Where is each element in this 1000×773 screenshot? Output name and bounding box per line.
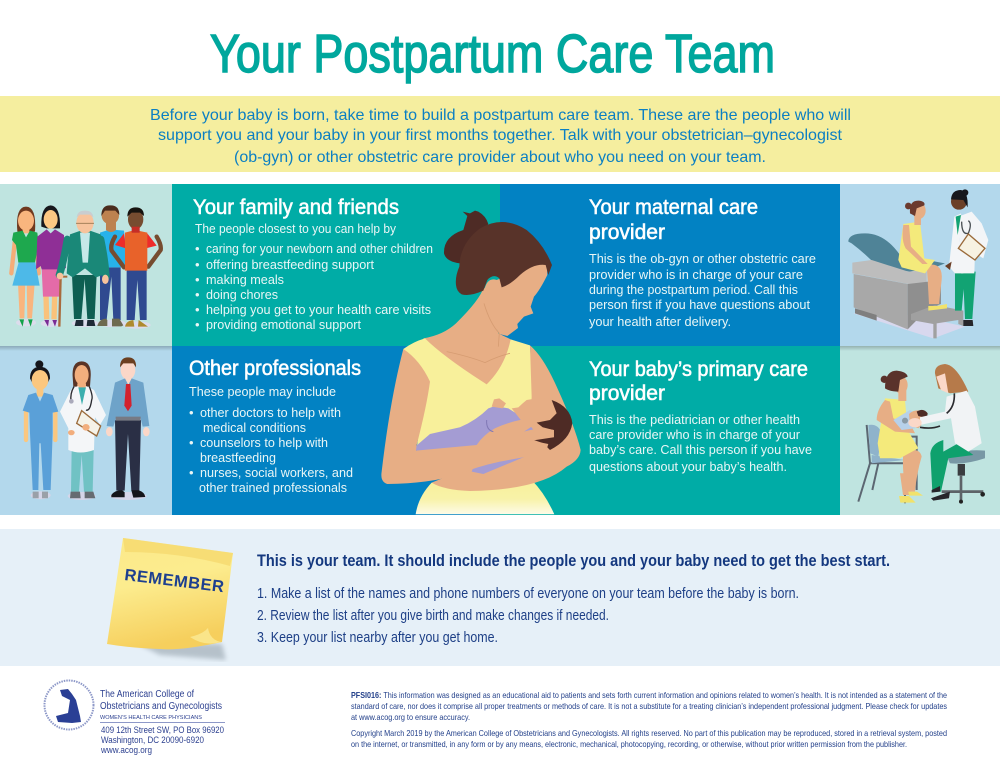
baby hand: [492, 398, 506, 408]
icon: exam room with doctor: [848, 189, 988, 338]
body text: [589, 251, 816, 329]
remember heading: This is your team. It should include the people you and your baby need to get the best start.: [257, 552, 890, 570]
body text: This is the ob-gyn or other obstetric care: [589, 251, 816, 266]
stool: [942, 450, 985, 504]
intro banner: Before your baby is born, take time to build a postpartum care team. These are the people who will: [150, 107, 851, 124]
bullet list: breastfeeding: [200, 450, 276, 465]
body text: [589, 412, 812, 474]
numbered list: 3. Keep your list nearby after you get home.: [257, 630, 498, 646]
bullet list: •: [189, 405, 194, 420]
heading: provider: [589, 221, 665, 244]
bullet list: counselors to help with: [200, 435, 328, 450]
bullet list: •: [195, 257, 200, 272]
man in tie: [106, 357, 150, 498]
panel: your baby's primary care provider: [589, 358, 812, 474]
bullet list: •: [195, 272, 200, 287]
bullet list: doing chores: [206, 287, 278, 302]
icon: family and friends group: [11, 205, 161, 329]
hair: [456, 222, 552, 295]
left arm and hand: [381, 349, 554, 484]
bun: [444, 211, 488, 263]
bullet list: •: [189, 435, 194, 450]
panel: other professionals: [189, 357, 361, 495]
body text: This is the pediatrician or other health: [589, 412, 800, 427]
right arm: [432, 345, 581, 491]
mother: [877, 371, 923, 503]
bullet list: •: [195, 287, 200, 302]
exam table: [848, 233, 945, 329]
body text: questions about your baby’s health.: [589, 459, 787, 474]
bullet list: making meals: [206, 272, 284, 287]
grandfather in teal jacket: [57, 211, 109, 327]
step: [911, 305, 963, 338]
bullet list: caring for your newborn and other children: [206, 241, 433, 256]
address: [100, 725, 224, 755]
sticky note: [107, 538, 233, 660]
bullet list: •: [195, 302, 200, 317]
organisation name: [100, 689, 222, 721]
address: 409 12th Street SW, PO Box 96920: [101, 725, 224, 735]
bullet list: helping you get to your health care visits: [206, 302, 431, 317]
note label: REMEMBER: [124, 566, 225, 596]
body text: provider who is in charge of your care: [589, 267, 803, 282]
bullet list: other trained professionals: [199, 480, 347, 495]
numbered list: 2. Review the list after you give birth and make changes if needed.: [257, 608, 609, 624]
address: Washington, DC 20090-6920: [101, 735, 204, 745]
panel: remember band: [0, 529, 1000, 666]
heading: provider: [589, 382, 665, 405]
bullet list: other doctors to help with: [200, 405, 341, 420]
intro text: These people may include: [189, 384, 336, 399]
seal: [44, 680, 94, 730]
organisation name: The American College of: [100, 689, 194, 700]
man in orange: [111, 207, 161, 327]
disclaimer text: [351, 691, 947, 749]
heading: Your family and friends: [193, 196, 399, 219]
disclaimer text: at www.acog.org to ensure accuracy.: [351, 713, 470, 722]
patient: [898, 201, 947, 311]
bullet list: offering breastfeeding support: [206, 257, 374, 272]
woman in purple: [36, 205, 66, 327]
body text: person first if you have questions about: [589, 297, 810, 312]
icon: other professionals group: [23, 357, 150, 500]
icon: pediatric visit: [858, 364, 985, 504]
nurse: [23, 360, 58, 498]
baby hair: [532, 400, 572, 450]
woman in green: [11, 207, 40, 327]
bullet list: providing emotional support: [206, 317, 361, 332]
chair: [858, 425, 917, 503]
doctor: [945, 189, 988, 326]
intro banner: (ob-gyn) or other obstetric care provider about who you need on your team.: [234, 149, 766, 166]
bullet list: [195, 241, 433, 332]
title: Your Postpartum Care Team: [210, 24, 775, 84]
body text: your health after delivery.: [589, 314, 731, 329]
numbered list: 1. Make a list of the names and phone numbers of everyone on your team before the baby is born.: [257, 586, 799, 602]
intro text: The people closest to you can help by: [195, 221, 396, 236]
logo: ACOG seal and address: [44, 680, 225, 755]
heading: [589, 196, 758, 244]
doctor in white coat: [60, 361, 106, 498]
disclaimer text: on the internet, or transmitted, in any form or by any means, electronic, mechanical, photocopying, recording, or otherwise, without prior written permission from the publisher.: [351, 740, 907, 749]
heading: Your maternal care: [589, 196, 758, 219]
organisation name: WOMEN’S HEALTH CARE PHYSICIANS: [100, 715, 202, 721]
intro banner: support you and your baby in your first months together. Talk with your obstetrician–gynecologist: [158, 127, 843, 144]
man in blue shirt: [97, 205, 128, 326]
panel: colour grid background: [0, 184, 1000, 515]
address: www.acog.org: [100, 745, 152, 755]
face: [484, 260, 547, 336]
neck and chest: [423, 287, 512, 387]
body text: care provider who is in charge of your: [589, 427, 801, 442]
bullet list: •: [195, 317, 200, 332]
bullet list: [189, 405, 353, 495]
intro banner: [0, 96, 1000, 172]
bullet list: nurses, social workers, and: [200, 465, 353, 480]
icon: mother and child: [381, 211, 581, 514]
heading: [589, 358, 808, 405]
bullet list: •: [189, 465, 194, 480]
lower dress: [416, 480, 554, 514]
bullet list: medical conditions: [203, 420, 306, 435]
bullet list: •: [195, 241, 200, 256]
body text: during the postpartum period. Call this: [589, 282, 798, 297]
heading: Other professionals: [189, 357, 361, 380]
baby head: [512, 398, 560, 433]
baby: [893, 410, 920, 430]
panel: your maternal care provider: [589, 196, 816, 329]
baby body: [416, 406, 535, 474]
body text: baby’s care. Call this person if you have: [589, 442, 812, 457]
pediatrician: [908, 364, 982, 501]
heading: Your baby’s primary care: [589, 358, 808, 381]
upper dress: [403, 338, 533, 448]
panel: your family and friends: [193, 196, 433, 332]
numbered list: [257, 586, 799, 646]
organisation name: Obstetricians and Gynecologists: [100, 701, 222, 712]
